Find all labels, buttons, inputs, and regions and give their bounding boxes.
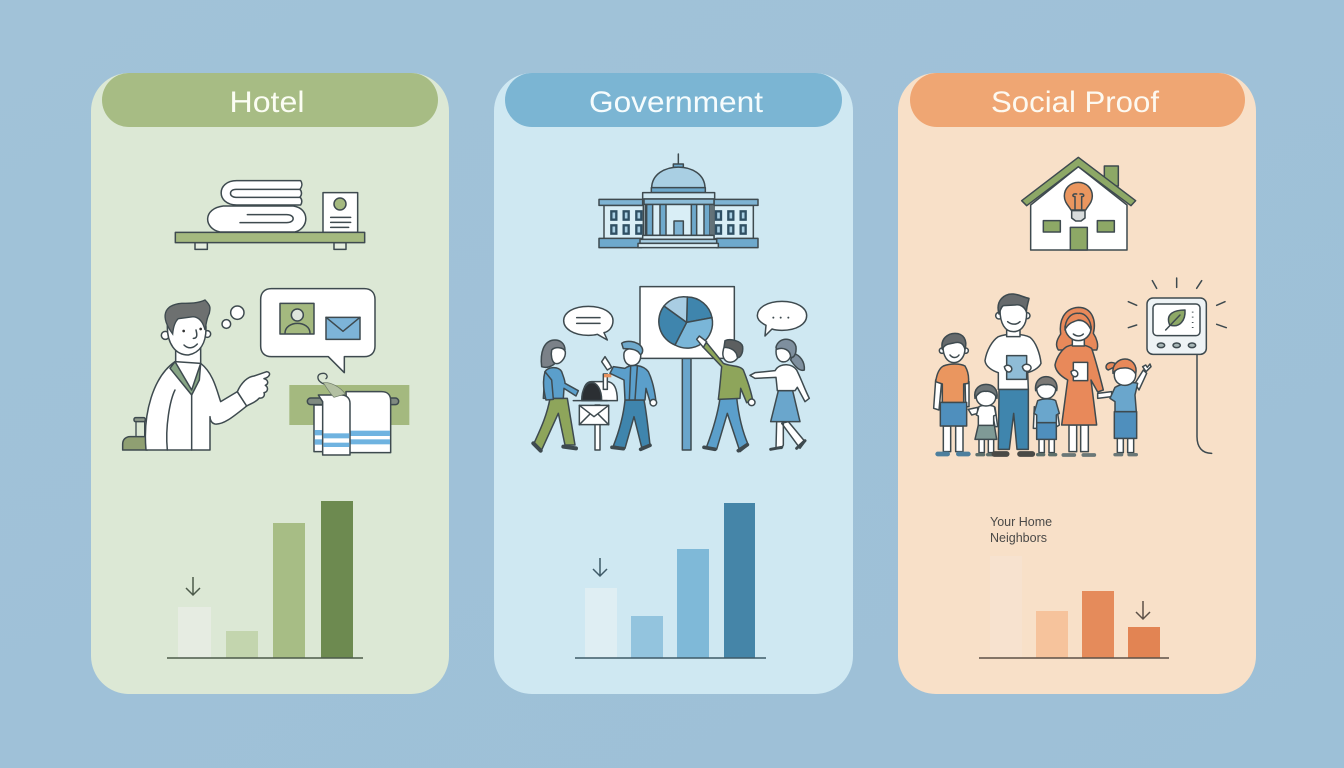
heading: social proof: Social Proof [991,86,1160,119]
panel: social proof [898,73,1256,694]
arrow: down [1136,601,1150,619]
chart: pie on board [640,287,734,450]
bar chart: hotel [167,501,363,658]
figure: woman in blue skirt [750,339,809,449]
icon: energy monitor [1128,278,1226,453]
legend: your home and neighbors [990,515,1052,545]
callout: speech bubble with photo and envelope [261,289,375,373]
bar chart: social proof [979,556,1169,658]
figure: boy in orange shirt [934,333,969,454]
icon: thought bubbles [222,306,244,328]
arrow: down [186,577,200,595]
icon: house with lightbulb [1022,157,1136,250]
heading: social proof [910,73,1245,127]
bar chart: government [575,503,766,658]
panel: government [494,73,853,694]
heading: hotel: Hotel [230,86,304,119]
figure: man in blue jacket [602,341,657,449]
figure: man pointing at chart [697,336,755,452]
figure: girl waving [1098,359,1151,455]
illustration: hotel scene [123,181,409,455]
figure: man in white coat pointing [145,300,270,450]
figure: mother in orange dress [1055,307,1103,455]
legend: your home and neighbors: Your Home [990,515,1052,529]
arrow: down [593,558,607,576]
icon: towels on rack [289,373,409,455]
icon: shelf with towels and card [175,181,365,249]
icon: government building [599,154,758,248]
figure: small boy [1033,377,1059,455]
illustration: social proof scene [934,157,1226,455]
callout: right speech bubble [757,301,807,336]
figure: father with tablet [985,294,1041,454]
heading: hotel [102,73,438,127]
heading: government [505,73,842,127]
legend: your home and neighbors: Neighbors [990,531,1047,545]
heading: government: Government [589,86,764,119]
illustration: government scene [533,154,809,452]
figure: woman at mailbox [533,340,578,451]
callout: left speech bubble [564,306,613,340]
panel: hotel [91,73,449,694]
icon: mailbox with envelope [573,374,617,450]
icon: suitcase [123,418,147,450]
figure: small girl [968,384,998,455]
